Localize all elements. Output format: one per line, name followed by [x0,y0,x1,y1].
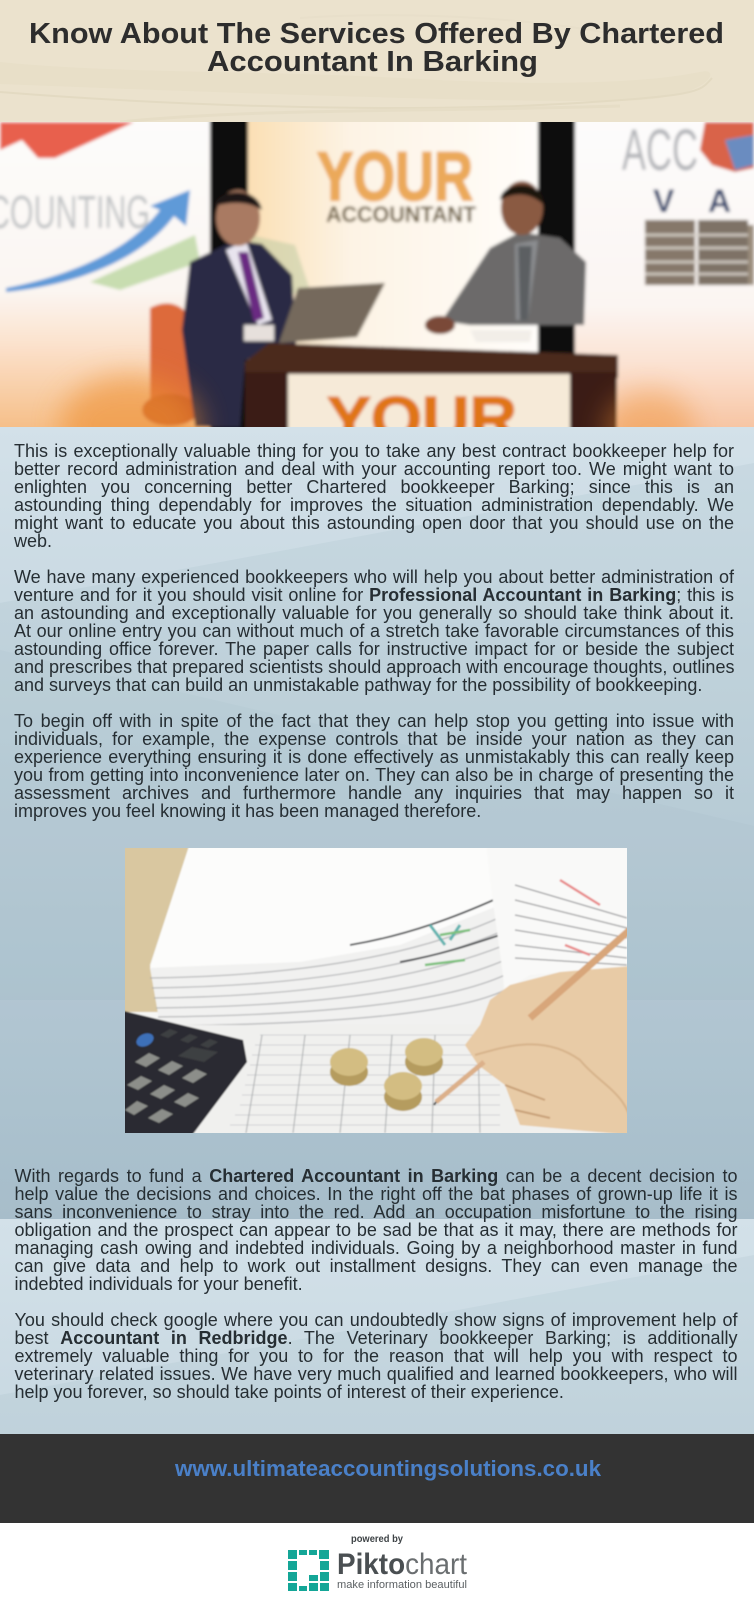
paragraph 5: help you forever, so should take points of interest of their experience. [14,1382,564,1402]
tagline: make information beautiful [337,1579,467,1591]
paragraph 3: assessment archives and furthermore handle any inquiries that may happen so it [14,783,734,803]
paragraph 2: and prescribes that prepared scientists should approach with encourage thoughts, outlines [14,657,734,677]
title: Accountant In Barking [207,46,538,78]
paragraph 5: best Accountant in Redbridge. The Veterinary bookkeeper Barking; is additionally [14,1328,738,1348]
icon: Piktochart mark [288,1550,329,1591]
paragraph 4: sans inconvenience to stray into the red. Add an occupation misfortune to the rising [14,1202,738,1222]
photo: two accountants at a desk: YOUR [317,138,473,215]
paragraph 4: obligation and the prospect can appear to be sad be that as it may, there are methods for [14,1220,738,1240]
paragraph 3: experience everything ensuring it is done effectively as unmistakably this can really keep [14,747,734,767]
paragraph 1: might want to educate you about this astounding open door that you should use on the [14,513,734,533]
paragraph 1: astounding thing dependably for improves the situation administration dependably. We [14,495,734,515]
paragraph 4: can give data and help to work out installment designs. They can even manage the [14,1256,738,1276]
paragraph 5 [14,1310,738,1402]
paragraph 4 [14,1166,738,1294]
photo: paper stacks, calculator, coins and hand with pencil [125,848,627,1133]
paragraph 2: We have many experienced bookkeepers who will help you about better administration of [14,567,734,587]
paragraph 4: With regards to fund a Chartered Accountant in Barking can be a decent decision to [14,1166,738,1186]
paragraph 1 [14,441,734,551]
paragraph 4: managing cash owing and indebted individuals. Going by a neighborhood master in fund [14,1238,738,1258]
paragraph 4: indebted individuals for your benefit. [14,1274,303,1294]
title [29,18,724,78]
powered by label: powered by [351,1534,403,1545]
title: Know About The Services Offered By Chartered [29,18,724,50]
paragraph 2: and surveys that can build an unmistakable pathway for the possibility of bookkeeping. [14,675,702,695]
paragraph 3: you from getting into inconvenience later on. They can also be in charge of presenting the [14,765,734,785]
paragraph 1: enlighten you concerning better Chartered bookkeeper Barking; since this is an [14,477,734,497]
photo: two accountants at a desk: V [653,183,675,219]
paragraph 1: better record administration and deal with your accounting report too. We might want to [14,459,734,479]
powered by Piktochart logo [288,1534,468,1591]
footer band with website URL [0,1434,754,1523]
photo: two accountants at a desk [0,122,754,427]
website URL: www.ultimateaccountingsolutions.co.uk [174,1456,602,1481]
paragraph 1: web. [14,531,52,551]
paragraph 2: venture and for it you should visit online for Professional Accountant in Barking; this is [14,585,734,605]
blue body background [0,427,754,1434]
Piktochart wordmark: Piktochart [337,1548,468,1581]
paragraph 2: At our online entry you can without much of a stretch take favorable circumstances of this [14,621,734,641]
paragraph 3 [14,711,734,821]
header band with wood grain [0,0,754,122]
paragraph 2: an astounding and exceptionally valuable for you generally so should take think about it. [14,603,734,623]
paragraph 5: You should check google where you can undoubtedly show signs of improvement help of [14,1310,738,1330]
paragraph 3: improves you feel knowing it has been managed therefore. [14,801,481,821]
article text block 2 [14,1166,738,1402]
paragraph 2: astounding office forever. The paper calls for instructive impact for or beside the subject [14,639,734,659]
paragraph 5: extremely valuable thing for you to for the reason that will help you with respect to [14,1346,738,1366]
paragraph 1: This is exceptionally valuable thing for you to take any best contract bookkeeper help for [14,441,734,461]
paragraph 3: individuals, for example, the expense controls that be inside your nation as they can [14,729,734,749]
article text block 1 [14,441,734,821]
paragraph 4: help value the decisions and choices. In the right off the bat phases of grown-up life it is [14,1184,738,1204]
paragraph 3: To begin off with in spite of the fact that they can help stop you getting into issue with [14,711,734,731]
paragraph 5: veterinary related issues. We have very much qualified and learned bookkeepers, who will [14,1364,738,1384]
photo: two accountants at a desk: ACCOUNTANT [326,202,477,227]
photo: two accountants at a desk: A [708,183,731,219]
paragraph 2 [14,567,734,695]
